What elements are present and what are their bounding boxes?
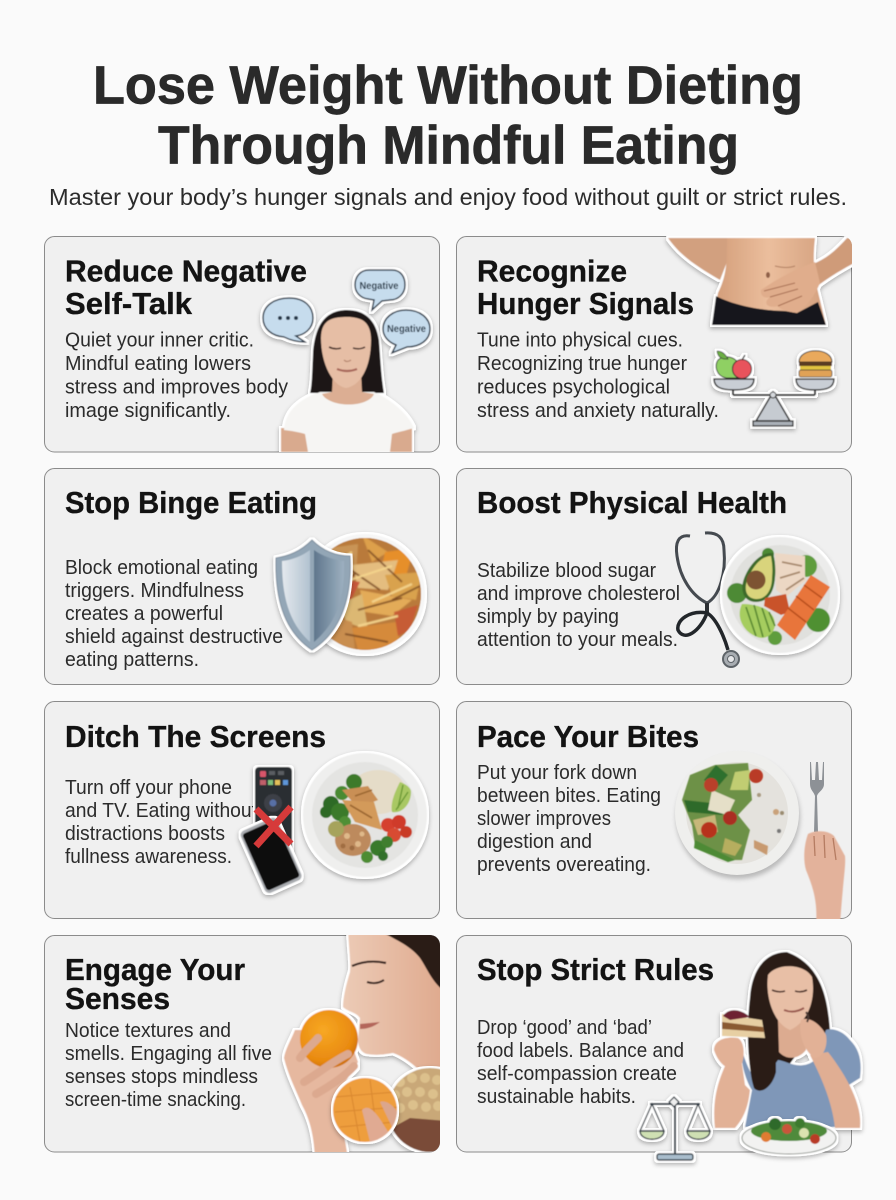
icon: speech bubble Negative (right): Negative: [387, 324, 426, 335]
icon: red cross: [256, 807, 291, 846]
body text: self-compassion create: [477, 1062, 677, 1085]
icon: speech bubble with dots: [263, 298, 313, 342]
body text: screen-time snacking.: [65, 1088, 246, 1111]
body text: [477, 761, 661, 876]
body text: [65, 1019, 272, 1111]
heading: Reduce Negative Self-Talk: Self-Talk: [65, 286, 193, 321]
icon: speech bubble Negative (top): [355, 270, 405, 310]
title: [93, 56, 803, 176]
icon: orange texture circle with finger: [333, 1078, 400, 1142]
body text: food labels. Balance and: [477, 1039, 684, 1062]
icon: hands on belly: [668, 238, 856, 325]
icon: balance scale with apples and burger: [714, 351, 834, 426]
icon: plate of chicken rice and salad: [303, 753, 427, 877]
icon: stethoscope: [676, 533, 739, 667]
body text: Put your fork down: [477, 761, 637, 784]
body text: shield against destructive: [65, 625, 283, 648]
icon: woman smelling an orange: [280, 935, 440, 1152]
heading: Engage Your Senses: Engage Your: [65, 952, 245, 987]
body text: simply by paying: [477, 605, 619, 628]
panel: Recognize Hunger Signals: [456, 236, 856, 452]
title: Lose Weight Without Dieting: [93, 56, 803, 116]
body text: slower improves: [477, 807, 611, 830]
body text: [477, 559, 680, 651]
body text: [65, 328, 289, 422]
icon: salad plate: [742, 1118, 836, 1154]
heading: Reduce Negative Self-Talk: [65, 254, 307, 321]
heading: Pace Your Bites: Pace Your Bites: [477, 719, 699, 754]
heading: Recognize Hunger Signals: Recognize: [477, 254, 627, 288]
icon: seeds and nuts circle: [390, 1066, 440, 1152]
body text: reduces psychological: [477, 376, 670, 398]
panel: Pace Your Bites: [456, 702, 852, 925]
body text: smells. Engaging all five: [65, 1042, 272, 1065]
body text: [65, 556, 283, 671]
heading: Stop Strict Rules: Stop Strict Rules: [477, 952, 714, 987]
body text: senses stops mindless: [65, 1065, 258, 1088]
body text: Stabilize blood sugar: [477, 559, 656, 582]
icon: shield: [276, 540, 350, 650]
body text: Quiet your inner critic.: [65, 328, 254, 352]
body text: creates a powerful: [65, 602, 223, 625]
body text: Mindful eating lowers: [65, 352, 251, 375]
body text: Recognizing true hunger: [477, 352, 687, 375]
body text: triggers. Mindfulness: [65, 579, 244, 602]
icon: speech bubble Negative (right): [383, 310, 430, 353]
body text: prevents overeating.: [477, 853, 651, 876]
subtitle: Master your body’s hunger signals and enjoy food without guilt or strict rules.: [49, 184, 847, 210]
heading: Recognize Hunger Signals: [477, 254, 694, 321]
icon: tv remote: [255, 767, 292, 869]
body text: attention to your meals.: [477, 628, 678, 651]
panel: Boost Physical Health: [456, 468, 852, 684]
body text: Block emotional eating: [65, 556, 258, 579]
heading: Ditch The Screens: Ditch The Screens: [65, 719, 326, 754]
icon: speech bubble Negative (top): Negative: [360, 281, 399, 292]
body text: stress and anxiety naturally.: [477, 399, 719, 422]
heading: Boost Physical Health: Boost Physical Health: [477, 485, 787, 520]
icon: woman eating cake: [714, 952, 861, 1128]
body text: fullness awareness.: [65, 845, 232, 868]
body text: Turn off your phone: [65, 776, 232, 799]
heading: Engage Your Senses: Senses: [65, 981, 170, 1016]
body text: stress and improves body: [65, 376, 289, 398]
body text: [477, 1016, 684, 1108]
body text: sustainable habits.: [477, 1085, 636, 1108]
body text: [65, 776, 257, 868]
body text: eating patterns.: [65, 648, 199, 671]
body text: digestion and: [477, 830, 592, 853]
body text: Tune into physical cues.: [477, 328, 683, 352]
body text: Drop ‘good’ and ‘bad’: [477, 1016, 652, 1039]
icon: fork in hand: [804, 762, 845, 925]
icon: smartphone: [239, 816, 303, 895]
body text: image significantly.: [65, 399, 231, 422]
body text: and improve cholesterol: [477, 582, 680, 605]
panel: Reduce Negative Self-Talk: [44, 236, 440, 452]
panel: Engage Your Senses: [44, 935, 440, 1152]
body text: and TV. Eating without: [65, 799, 257, 822]
icon: justice scale: [640, 1097, 710, 1160]
panel: Stop Strict Rules: [456, 936, 861, 1160]
heading: Stop Binge Eating: Stop Binge Eating: [65, 485, 317, 520]
heading: Engage Your Senses: [65, 952, 245, 1016]
icon: half-eaten salad plate: [675, 751, 800, 879]
body text: [477, 328, 719, 422]
icon: plate with avocado and salmon: [722, 537, 838, 653]
icon: plate of chips: [305, 534, 425, 655]
body text: Notice textures and: [65, 1019, 231, 1042]
title: Through Mindful Eating: [158, 116, 739, 176]
icon: woman with eyes closed: [281, 310, 414, 452]
body text: between bites. Eating: [477, 784, 661, 807]
body text: distractions boosts: [65, 822, 225, 845]
heading: Reduce Negative Self-Talk: Reduce Negative: [65, 254, 307, 288]
panel: Stop Binge Eating: [44, 468, 440, 684]
heading: Recognize Hunger Signals: Hunger Signals: [477, 286, 694, 321]
panel: Ditch The Screens: [44, 702, 440, 918]
